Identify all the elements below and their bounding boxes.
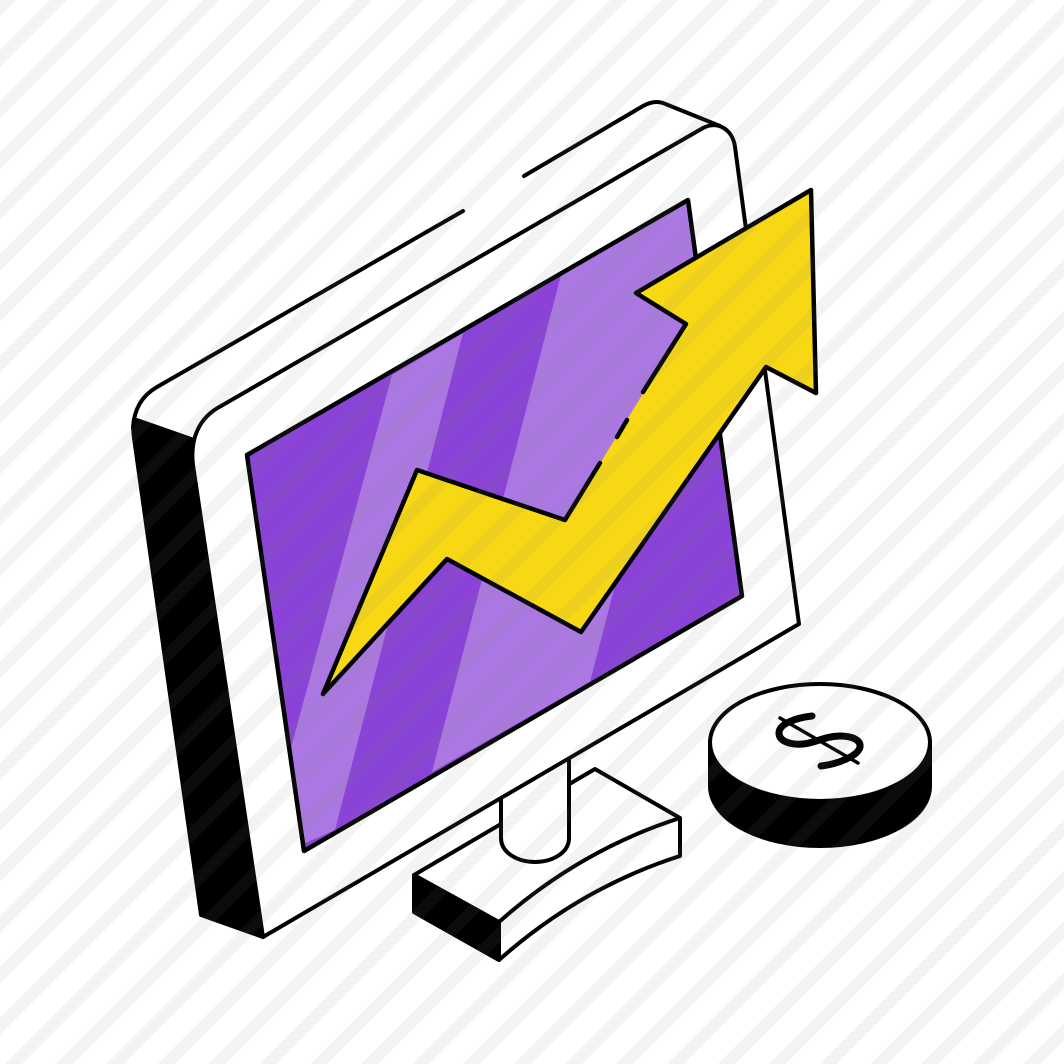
screen xyxy=(247,190,760,851)
illustration: monitor with rising arrow and dollar coin xyxy=(131,100,932,962)
monitor front face xyxy=(192,125,799,937)
monitor stand neck xyxy=(501,750,569,862)
monitor left side, black xyxy=(133,419,263,937)
monitor top side xyxy=(133,102,720,440)
rising arrow xyxy=(323,190,816,694)
monitor top outline with gap xyxy=(133,102,720,428)
monitor body xyxy=(133,102,799,937)
screen light reflections xyxy=(291,204,694,844)
icon: dollar sign xyxy=(779,716,860,766)
monitor stand base xyxy=(414,769,680,960)
dollar coin xyxy=(710,684,930,846)
